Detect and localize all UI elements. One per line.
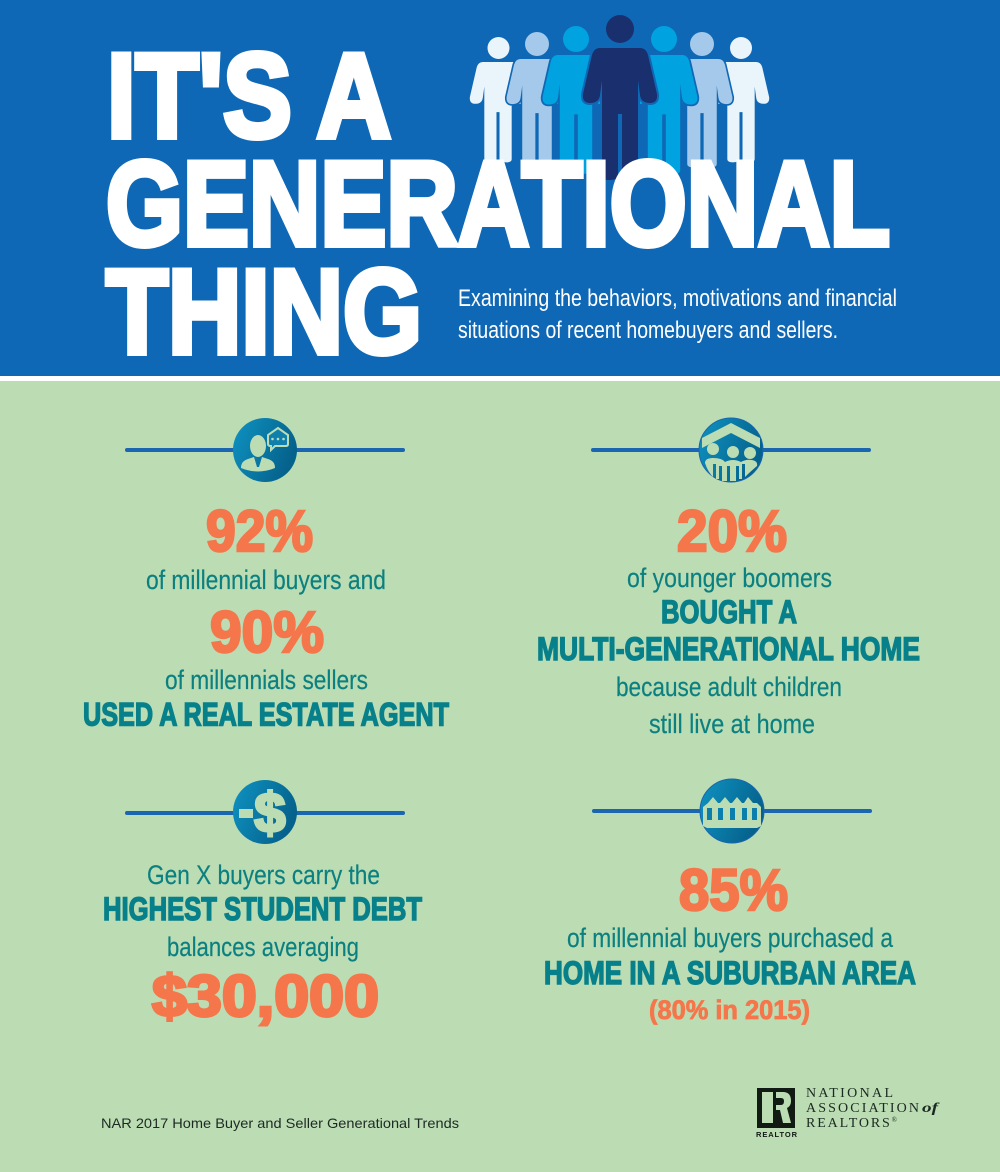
icon: group of people	[470, 15, 769, 180]
icon: agent with house speech bubble	[125, 418, 405, 482]
text: reason	[616, 672, 842, 739]
title: IT'S A	[107, 29, 391, 163]
logo: National Association of Realtors: ®	[892, 1116, 898, 1124]
panel: multi-generational home	[537, 418, 920, 739]
subtitle	[458, 285, 897, 344]
logo: National Association of Realtors	[756, 1086, 940, 1139]
panel: student debt	[103, 780, 422, 1029]
title	[106, 29, 890, 379]
white divider band	[0, 376, 1000, 381]
page background	[0, 381, 1000, 1172]
icon: picket fence	[592, 779, 872, 843]
heading: bought a multi-generational home: BOUGHT A	[661, 594, 797, 630]
stat: $30,000: $30,000	[152, 964, 379, 1029]
logo: National Association of Realtors: REALTORS	[806, 1116, 890, 1131]
icon: R block	[757, 1088, 795, 1128]
text: younger boomers: of younger boomers	[627, 563, 832, 593]
subtitle: situations of recent homebuyers and sellers.	[458, 317, 838, 344]
panel: real estate agent	[83, 418, 449, 732]
logo: National Association of Realtors: REALTOR	[756, 1130, 798, 1139]
heading: bought a multi-generational home: MULTI-GENERATIONAL HOME	[537, 631, 920, 667]
text: reason: because adult children	[616, 672, 842, 702]
logo: National Association of Realtors: NATIONAL	[806, 1086, 893, 1101]
icon: family under roof	[591, 418, 871, 482]
panel: suburban area	[544, 779, 916, 1025]
text: millennial sellers: of millennials sellers	[165, 665, 368, 695]
icon: minus dollar: $	[254, 781, 286, 844]
icon: minus dollar	[125, 780, 405, 844]
source note: NAR 2017 Home Buyer and Seller Generational Trends	[101, 1115, 459, 1131]
logo: National Association of Realtors: ASSOCIATION	[806, 1101, 919, 1116]
subtitle: Examining the behaviors, motivations and financial	[458, 285, 897, 312]
heading: bought a multi-generational home	[537, 594, 920, 667]
stat: 85%: 85%	[679, 858, 788, 923]
stat: 92%: 92%	[206, 499, 313, 564]
logo: National Association of Realtors: of	[922, 1101, 940, 1116]
heading: used a real estate agent: USED A REAL ESTATE AGENT	[83, 696, 449, 732]
text: millennial buyers: of millennial buyers and	[146, 565, 386, 595]
stat: 20%: 20%	[677, 499, 787, 564]
header background	[0, 0, 1000, 376]
heading: home in a suburban area: HOME IN A SUBURBAN AREA	[544, 955, 916, 991]
stat: 90%: 90%	[210, 600, 324, 665]
text: 80% in 2015: (80% in 2015)	[649, 995, 810, 1025]
text: reason: still live at home	[649, 709, 815, 739]
title: THING	[106, 245, 422, 379]
text: millennial buyers purchased: of millennial buyers purchased a	[567, 923, 894, 953]
text: Gen X buyers: Gen X buyers carry the	[147, 860, 380, 890]
heading: highest student debt: HIGHEST STUDENT DEBT	[103, 891, 422, 927]
text: balances averaging: balances averaging	[167, 932, 359, 962]
